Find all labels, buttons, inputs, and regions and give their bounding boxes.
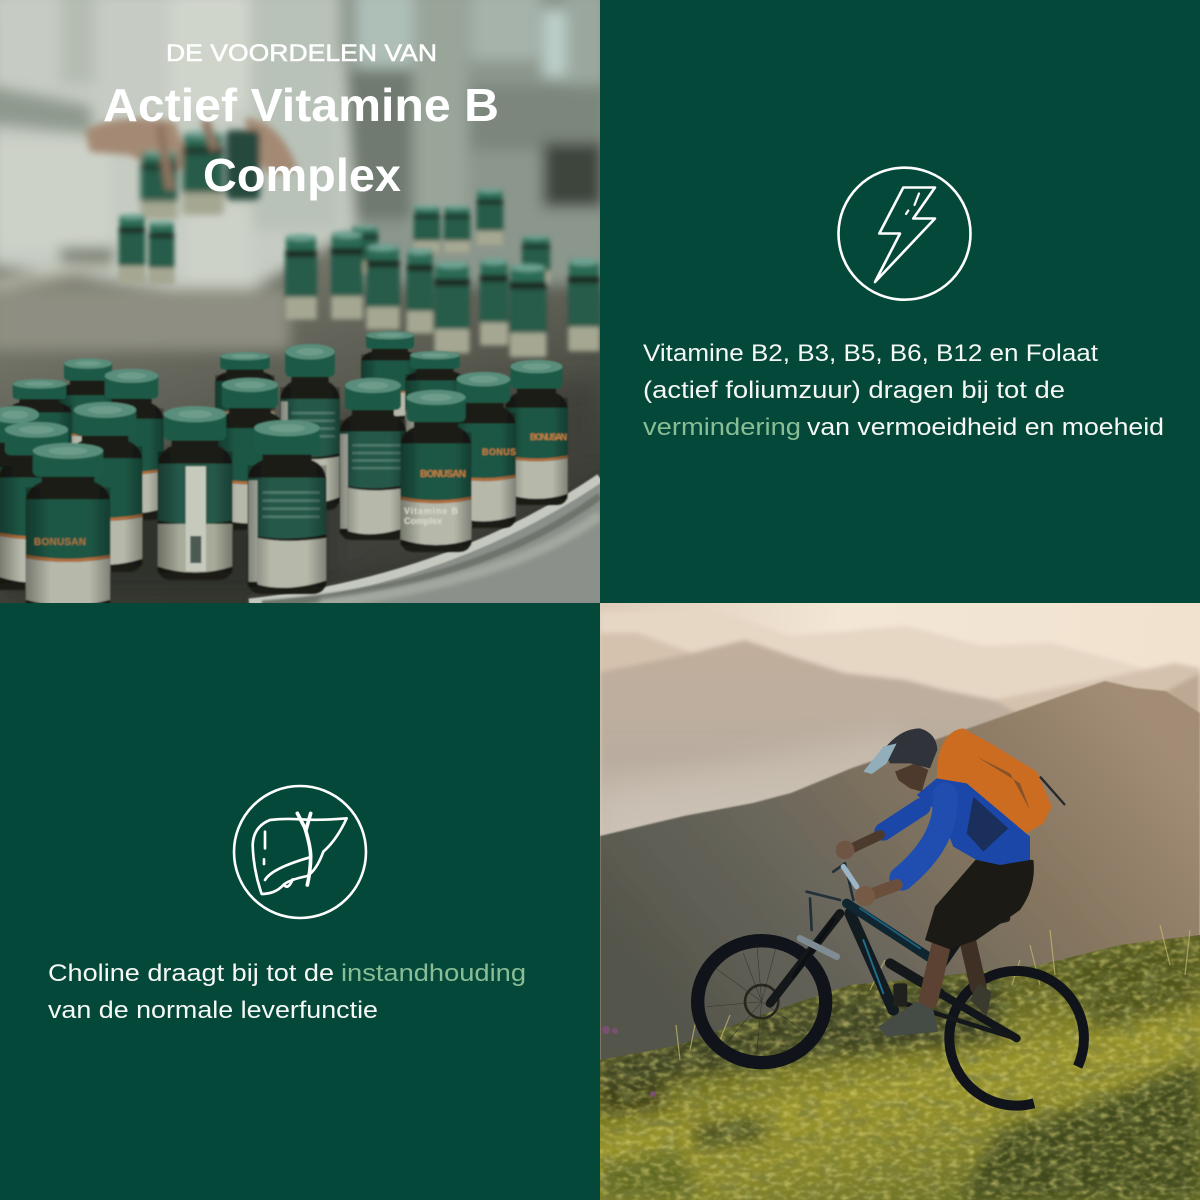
front bottles: BONUSAN [530, 432, 567, 442]
legs [928, 943, 978, 1000]
table rim [298, 478, 600, 603]
bike wheels [698, 941, 1084, 1106]
table reflections [0, 380, 600, 600]
hands holding bottles [85, 118, 298, 219]
energy benefit text: van vermoeidheid en moeheid [807, 414, 1164, 441]
main title: Actief Vitamine B [103, 79, 499, 131]
energy benefit text [643, 340, 1164, 441]
energy benefit text: (actief foliumzuur) dragen bij tot de [643, 377, 1065, 404]
front bottles: BONUSAN [420, 469, 466, 480]
main title [103, 79, 499, 201]
bike frame [770, 863, 1017, 1038]
panel: energy benefit [643, 168, 1164, 441]
front bottles: BONUS [482, 447, 516, 457]
icon: liver in circle [234, 786, 366, 918]
liver benefit text: instandhouding [341, 960, 526, 987]
energy benefit text: Vitamine B2, B3, B5, B6, B12 en Folaat [643, 340, 1098, 367]
rider and bicycle [698, 728, 1084, 1106]
main title: Complex [203, 149, 401, 201]
front bottles: Vitamine B [404, 506, 458, 516]
front bottles: BONUSAN [34, 537, 86, 548]
shorts [925, 857, 1034, 949]
panel: liver benefit [48, 786, 526, 1024]
icon: lightning bolt in circle [838, 168, 970, 300]
photo: bottles on production line [0, 0, 610, 613]
front bottles: Complex [404, 516, 442, 526]
liver benefit text [48, 960, 526, 1024]
head and helmet [895, 763, 928, 792]
blurred back rows of bottles [119, 189, 600, 357]
grassy hillside [600, 930, 1200, 1200]
liver benefit text: van de normale leverfunctie [48, 997, 378, 1024]
liver benefit text: Choline draagt bij tot de [48, 960, 334, 987]
shoes [878, 1002, 938, 1037]
torso and arms [917, 778, 1030, 865]
photo: mountain biker at sunset [600, 603, 1200, 1200]
energy benefit text: vermindering [643, 414, 801, 441]
overline heading: DE VOORDELEN VAN [166, 40, 437, 67]
backpack [936, 728, 1052, 834]
front bottles [0, 331, 568, 613]
hazy mountain ridges [600, 614, 1200, 836]
